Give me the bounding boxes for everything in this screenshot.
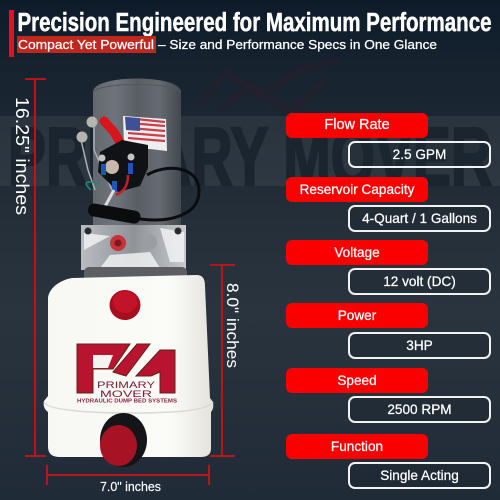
spec: speed label: Speed xyxy=(337,373,377,388)
spec: power value: 3HP xyxy=(406,338,433,353)
PM logo xyxy=(77,344,177,404)
PM logo: MOVER xyxy=(100,389,152,400)
spec: voltage label xyxy=(286,240,428,265)
spec: reservoir label: Reservoir Capacity xyxy=(300,182,414,197)
spec: flow rate label xyxy=(286,113,428,138)
spec: flow rate value xyxy=(348,141,491,168)
subtitle: Compact Yet Powerful xyxy=(18,38,154,52)
spec: reservoir label xyxy=(286,177,428,202)
spec: speed value xyxy=(348,396,491,422)
subtitle xyxy=(17,36,437,53)
spec: speed value: 2500 RPM xyxy=(387,402,452,417)
label: 8.0 inches: 8.0" inches xyxy=(223,283,241,368)
spec: voltage value xyxy=(348,268,491,294)
reservoir tank xyxy=(44,275,213,457)
logo text: PRIMARY xyxy=(97,380,156,391)
motor cylinder xyxy=(93,78,181,226)
red fill cap xyxy=(110,290,140,320)
drain plug xyxy=(100,413,147,467)
flag label xyxy=(123,116,167,151)
spec: voltage value: 12 volt (DC) xyxy=(383,274,456,289)
spec: function label: Function xyxy=(331,439,383,454)
subtitle: – Size and Performance Specs in One Glance xyxy=(158,38,437,52)
spec: speed label xyxy=(286,368,428,393)
spec: reservoir value xyxy=(348,205,491,232)
spec: power label xyxy=(286,303,428,328)
dimension: width 7.0 xyxy=(47,465,209,485)
spec: function value xyxy=(348,462,491,488)
spec: reservoir value: 4-Quart / 1 Gallons xyxy=(362,211,477,226)
dimension: height 8.0 xyxy=(210,265,235,456)
spec: flow rate label: Flow Rate xyxy=(324,117,390,133)
spec: power value xyxy=(348,332,491,358)
hose clamp xyxy=(84,267,187,282)
label: 16.25 inches: 16.25" inches xyxy=(12,97,32,215)
watermark xyxy=(0,58,500,200)
PM logo: HYDRAULIC DUMP BED SYSTEMS xyxy=(77,398,177,404)
spec: function label xyxy=(286,434,428,459)
title accent bar xyxy=(9,10,14,57)
spec: function value: Single Acting xyxy=(380,468,459,483)
dimension: height 16.25 xyxy=(25,79,46,456)
valve block xyxy=(81,225,186,270)
spec: flow rate value: 2.5 GPM xyxy=(393,147,446,162)
spec: power label: Power xyxy=(338,308,376,323)
label: 7.0 inches: 7.0" inches xyxy=(100,480,161,494)
spec: voltage label: Voltage xyxy=(334,245,380,260)
solenoid and wiring xyxy=(76,116,199,225)
